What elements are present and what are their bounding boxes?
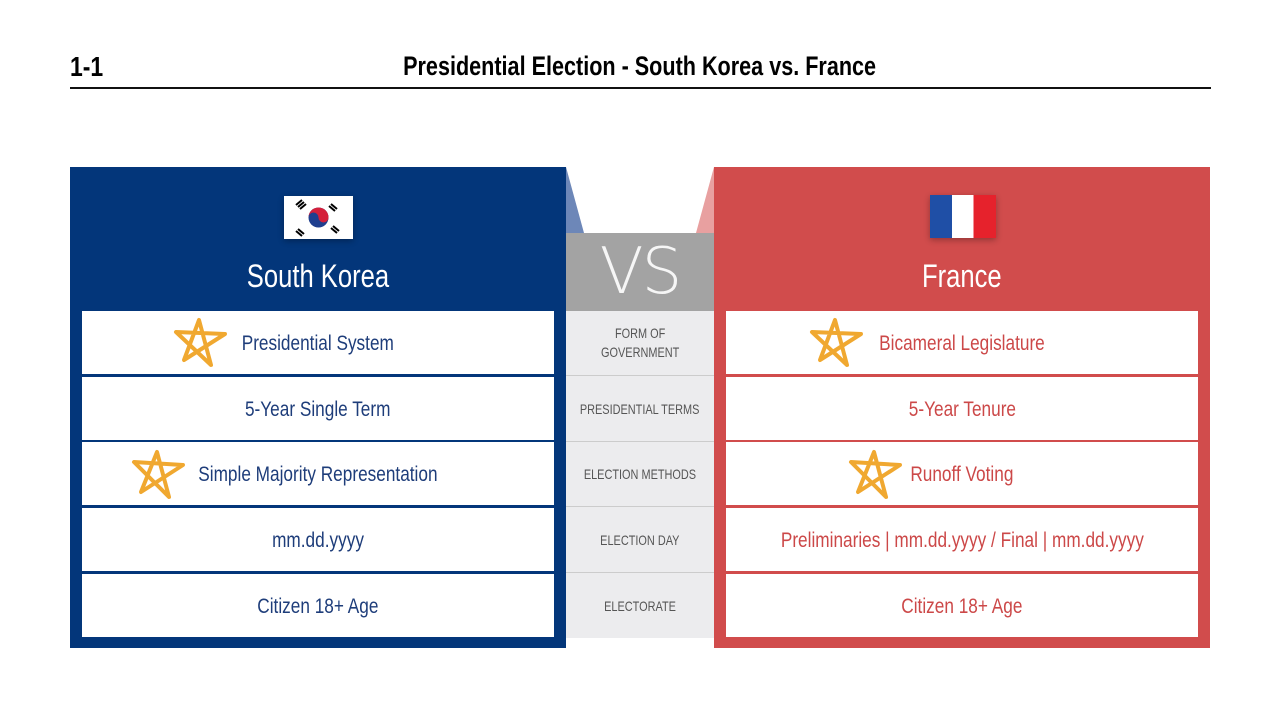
text: Bicameral Legislature [879, 332, 1045, 355]
text: PRESIDENTIAL TERMS [580, 400, 700, 416]
icon: star 1 [176, 320, 225, 365]
middle labels [566, 311, 714, 638]
number: 1-1 [70, 51, 103, 82]
icon: Korean flag [284, 196, 353, 239]
text: mm.dd.yyyy [272, 529, 364, 552]
text: 5-Year Tenure [908, 398, 1016, 421]
icon: French flag [930, 195, 996, 238]
icon: star 4 [851, 452, 900, 497]
text: GOVERNMENT [601, 344, 679, 360]
text: ELECTION DAY [600, 532, 680, 548]
title: Presidential Election - South Korea vs. France [404, 51, 876, 81]
France rows [726, 311, 1198, 637]
text: Citizen 18+ Age [257, 595, 379, 618]
text: FORM OF [615, 325, 665, 341]
panel: South Korea [70, 167, 566, 648]
text: 5-Year Single Term [245, 398, 391, 421]
text: Preliminaries | mm.dd.yyyy / Final | mm.dd.yyyy [780, 529, 1143, 552]
Korea rows [82, 311, 554, 637]
icon: star 3 [812, 320, 861, 365]
text: ELECTORATE [604, 598, 676, 614]
heading: France [922, 258, 1002, 294]
VS box: VS [600, 235, 680, 309]
text: Simple Majority Representation [198, 463, 438, 486]
VS box [566, 233, 714, 311]
text: Citizen 18+ Age [901, 595, 1023, 618]
icon: star 2 [134, 452, 183, 497]
panel: France [714, 167, 1210, 648]
text: Presidential System [242, 332, 394, 355]
text: Runoff Voting [910, 463, 1014, 486]
text: ELECTION METHODS [584, 466, 696, 482]
wedges [566, 167, 714, 233]
heading: South Korea [247, 258, 389, 294]
